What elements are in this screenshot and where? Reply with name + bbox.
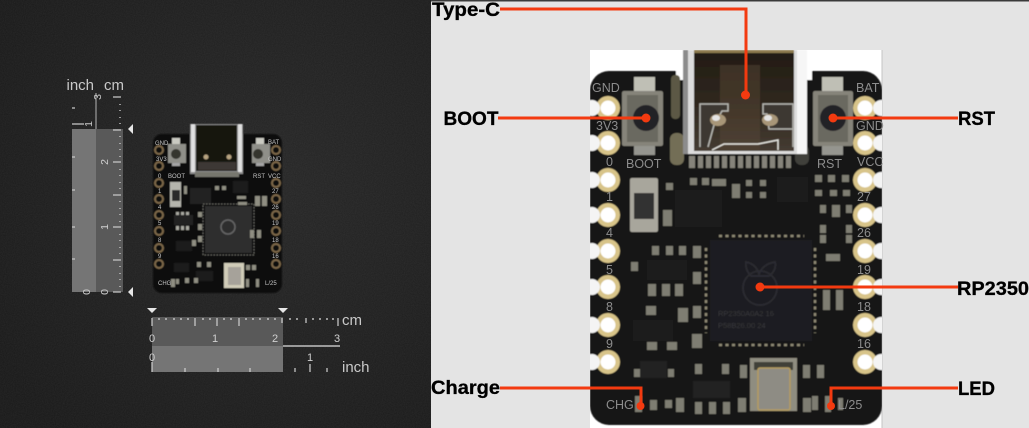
- board photo large: P58B26.00 24: [718, 321, 766, 330]
- parts: [170, 182, 181, 207]
- horizontal ruler: 1: [212, 333, 218, 345]
- small board silk labels: 3V3: [156, 157, 167, 163]
- label: inch vertical: inch: [66, 77, 94, 94]
- USB: [190, 124, 243, 174]
- silk labels: BOOT: [626, 157, 662, 171]
- vertical ruler: 1: [99, 224, 111, 230]
- silk labels: 19: [857, 263, 871, 277]
- horizontal ruler: 0: [149, 333, 155, 345]
- small board silk labels: 4: [158, 205, 162, 211]
- small board silk labels: 18: [272, 238, 279, 244]
- silk labels: 16: [857, 337, 871, 351]
- callout: RST: RST: [958, 108, 995, 130]
- small board silk labels: [155, 140, 282, 287]
- horizontal ruler: 3: [334, 333, 340, 345]
- panel: size comparison: [0, 0, 431, 428]
- silk labels: L/25: [838, 398, 862, 412]
- label: cm vertical: cm: [104, 77, 124, 94]
- horizontal ruler: 2: [272, 333, 278, 345]
- silk labels: 4: [606, 226, 613, 240]
- edge pads right: [852, 95, 882, 375]
- silk labels: CHG: [606, 398, 634, 412]
- small board silk labels: 0: [158, 174, 162, 180]
- small board silk labels: CHG: [158, 281, 172, 287]
- small board silk labels: 5: [158, 221, 162, 227]
- board photo large: RP2350A0A2 16: [718, 309, 774, 318]
- buttons: [172, 138, 180, 144]
- small board silk labels: 8: [158, 238, 162, 244]
- small board silk labels: VCC: [268, 174, 281, 180]
- small board silk labels: 9: [158, 254, 162, 260]
- callout: BOOT: [444, 108, 650, 130]
- crystal: [750, 358, 797, 411]
- edge pads left: [590, 95, 621, 375]
- silk labels: 3V3: [596, 119, 618, 133]
- board photo small: [153, 124, 282, 293]
- silk labels: 5: [606, 263, 613, 277]
- horizontal ruler: 1: [307, 352, 313, 364]
- label: inch horizontal: inch: [342, 359, 370, 376]
- small board silk labels: 19: [272, 221, 279, 227]
- vertical ruler: [72, 93, 133, 297]
- silk labels: BAT: [856, 81, 880, 95]
- silk labels: 26: [857, 226, 871, 240]
- vertical ruler: 3: [92, 94, 104, 100]
- callout: Type-C: [432, 0, 750, 100]
- castellated pads: [155, 146, 280, 268]
- horizontal ruler: 0: [149, 352, 155, 364]
- BOOT button: [634, 77, 655, 91]
- PCB: [590, 71, 882, 425]
- small board silk labels: GND: [268, 157, 282, 163]
- callout: Charge: Charge: [431, 377, 500, 399]
- silk labels: 27: [857, 190, 871, 204]
- small components: [631, 175, 852, 414]
- vertical ruler: 2: [99, 159, 111, 165]
- vertical ruler: 0: [99, 289, 111, 295]
- callout: RP2350: RP2350: [957, 278, 1029, 300]
- silk labels: GND: [592, 81, 620, 95]
- small board silk labels: BOOT: [168, 174, 185, 180]
- horizontal ruler: [147, 308, 340, 372]
- small board silk labels: 1: [158, 189, 162, 195]
- silk labels: GND: [856, 119, 884, 133]
- RP2350 chip: [710, 240, 812, 341]
- RST button: [822, 77, 843, 91]
- callout: Charge: [431, 377, 644, 410]
- small board silk labels: GND: [155, 141, 169, 147]
- small board silk labels: L/25: [265, 281, 277, 287]
- USB contacts: [689, 156, 791, 168]
- silk labels: 8: [606, 300, 613, 314]
- USB connector: [671, 75, 680, 119]
- board photo large: [584, 50, 889, 425]
- silk labels: [592, 81, 884, 412]
- small board silk labels: 27: [272, 189, 279, 195]
- silk labels: VCC: [857, 155, 883, 169]
- small board silk labels: 16: [272, 254, 279, 260]
- small board silk labels: 26: [272, 205, 279, 211]
- panel: annotated board: [431, 0, 1029, 428]
- silk labels: 18: [857, 300, 871, 314]
- vertical ruler: 0: [81, 289, 93, 295]
- small board silk labels: BAT: [268, 140, 280, 146]
- callout: LED: [827, 378, 995, 410]
- label: cm horizontal: cm: [342, 312, 362, 329]
- callout: RST: [828, 108, 995, 130]
- callout: LED: LED: [958, 378, 995, 400]
- small board silk labels: RST: [253, 174, 265, 180]
- callout: BOOT: BOOT: [444, 108, 499, 130]
- silk labels: RST: [817, 157, 842, 171]
- resistor: [630, 178, 658, 232]
- silk labels: 0: [606, 155, 613, 169]
- silk labels: 9: [606, 337, 613, 351]
- silk labels: 1: [606, 190, 613, 204]
- vertical ruler: 1: [83, 121, 95, 127]
- callout: RP2350: [756, 278, 1029, 300]
- ICs: [675, 190, 722, 227]
